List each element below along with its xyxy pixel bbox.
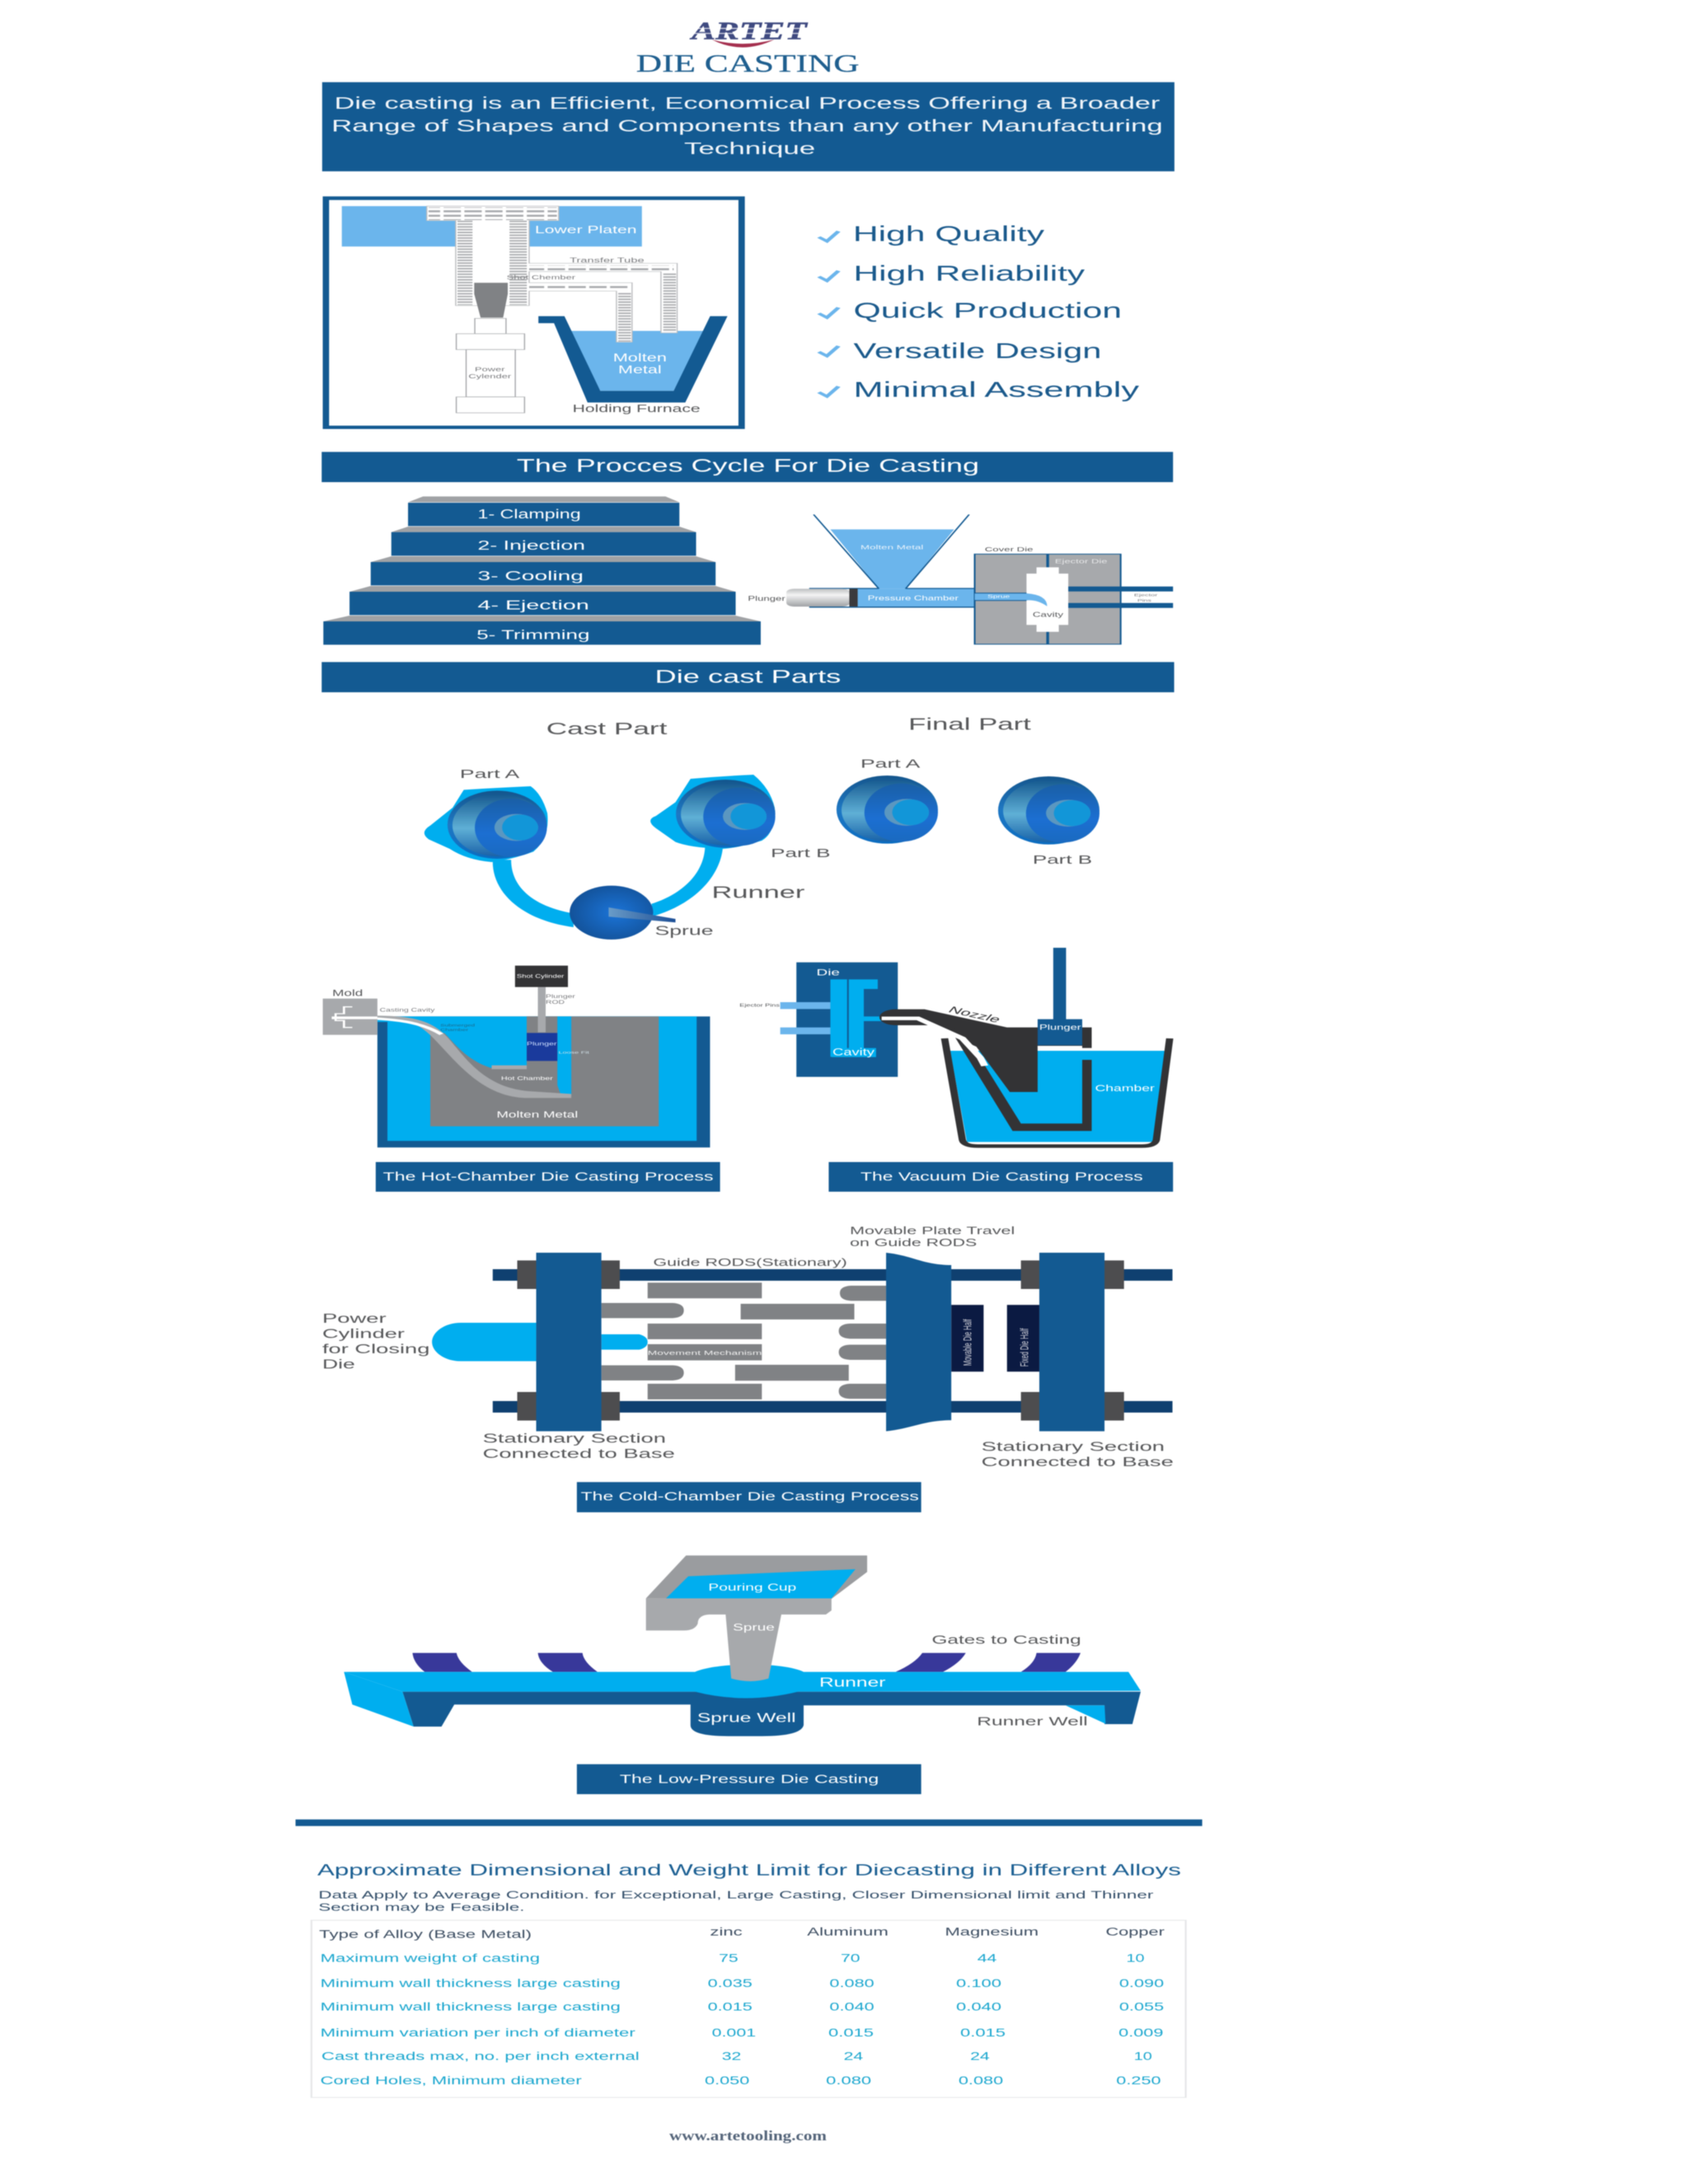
- cold chamber injection diagram: Ejector Die: [1055, 558, 1107, 565]
- row: cast threads: 24: [970, 2050, 990, 2063]
- cast part with runner and sprue: [424, 775, 776, 940]
- row: cast threads: [321, 2050, 1152, 2063]
- cold-chamber machine diagram: [432, 1253, 1173, 1432]
- heading banner: die cast parts: Die cast Parts: [655, 666, 841, 687]
- logo: ARTET: [690, 16, 808, 47]
- intro banner: [322, 82, 1175, 171]
- sprue: Sprue: [733, 1622, 775, 1633]
- lower platen: [342, 206, 642, 246]
- plunger: [1038, 948, 1082, 1045]
- benefits checklist: High Quality: [853, 222, 1044, 246]
- transfer tube and shot chamber: [427, 206, 678, 342]
- movable die half: [951, 1305, 983, 1371]
- table heading: Approximate Dimensional and Weight Limit for Diecasting in Different Alloys: [317, 1861, 1181, 1879]
- heading banner: process cycle: The Procces Cycle For Die Casting: [517, 456, 979, 476]
- runner body: [344, 1665, 1141, 1736]
- hot-chamber diagram: Hot Chamber: [501, 1076, 553, 1082]
- low-pressure labels: [697, 1633, 1088, 1727]
- caption: cold-chamber: [577, 1482, 921, 1512]
- stair steps: 2- Injection: [478, 539, 585, 553]
- fixed die half: Fixed Die Half: [1019, 1329, 1031, 1366]
- power cylinder: [457, 318, 524, 413]
- benefits checklist: Versatile Design: [854, 339, 1101, 363]
- data table: [312, 1920, 1186, 2097]
- row: cored holes: [321, 2074, 1161, 2087]
- hot-chamber diagram: Plunger: [546, 993, 575, 1000]
- row: maximum weight: 10: [1126, 1952, 1145, 1965]
- caption: low-pressure: [577, 1765, 921, 1794]
- transfer tube and shot chamber: Transfer Tube: [570, 256, 645, 264]
- hot-chamber diagram: Chamber: [440, 1029, 469, 1032]
- gooseneck nozzle: Nozzle: [945, 1005, 1004, 1024]
- holding furnace: Holding Furnace: [573, 403, 701, 415]
- die and cavity: Die: [817, 967, 840, 977]
- power cylinder: [432, 1323, 648, 1361]
- cold-chamber labels: for Closing: [322, 1343, 429, 1357]
- table header: zinc: [710, 1925, 743, 1938]
- hot-chamber diagram: Submerged: [440, 1024, 475, 1028]
- part labels: Sprue: [655, 924, 714, 938]
- row: maximum weight: [321, 1952, 1145, 1965]
- gates to casting: [412, 1653, 1081, 1672]
- shot cylinder and plunger: [515, 966, 568, 1061]
- caption: hot-chamber: [376, 1162, 720, 1192]
- row: wall thickness 2: 0.040: [956, 2000, 1001, 2013]
- fixed die half: [1007, 1305, 1039, 1371]
- gooseneck nozzle: [879, 1005, 1092, 1131]
- table header: Magnesium: [945, 1925, 1039, 1938]
- mold block: [323, 999, 377, 1035]
- row: wall thickness 2: 0.040: [829, 2000, 874, 2013]
- holding furnace: [538, 316, 728, 415]
- title: DIE CASTING: [636, 49, 860, 77]
- intro banner: Die casting is an Efficient, Economical Process Offering a Broader: [335, 93, 1160, 112]
- table note: [318, 1888, 1153, 1913]
- row: wall thickness 1: 0.080: [829, 1976, 874, 1990]
- row: minimum variation: 0.009: [1118, 2026, 1163, 2039]
- shot cylinder and plunger: Plunger: [527, 1041, 557, 1047]
- row: cored holes: 0.080: [959, 2074, 1003, 2087]
- movable plate: [886, 1253, 951, 1432]
- row: minimum variation: [321, 2026, 1163, 2039]
- divider bar: [296, 1820, 1203, 1826]
- cold chamber injection diagram: Pins: [1137, 598, 1151, 602]
- stair steps: 5- Trimming: [476, 628, 589, 642]
- part labels: [460, 715, 1092, 938]
- hot-chamber diagram: ROD: [546, 999, 565, 1005]
- row: maximum weight: 75: [719, 1952, 738, 1965]
- low-pressure labels: Gates to Casting: [931, 1633, 1081, 1647]
- die cast parts section: [424, 715, 1100, 940]
- caption: low-pressure: The Low-Pressure Die Casting: [620, 1772, 879, 1785]
- crucible and chamber: Chamber: [1095, 1083, 1155, 1093]
- hot-chamber diagram: [323, 966, 710, 1147]
- row: wall thickness 2: [321, 2000, 1164, 2013]
- intro banner: Range of Shapes and Components than any other Manufacturing: [331, 116, 1163, 135]
- row: wall thickness 1: 0.100: [956, 1976, 1001, 1990]
- row: cored holes: 0.050: [705, 2074, 749, 2087]
- cold chamber injection diagram: Sprue: [987, 594, 1010, 599]
- footer website: www.artetooling.com: [669, 2128, 827, 2144]
- part labels: Part B: [1033, 853, 1092, 866]
- row: wall thickness 1: 0.090: [1119, 1976, 1164, 1990]
- hot-chamber diagram: Mold: [332, 988, 363, 998]
- hot-chamber and vacuum process section: [323, 948, 1173, 1192]
- table header: Aluminum: [807, 1925, 889, 1938]
- movement mechanism links: [602, 1282, 886, 1399]
- cold-chamber labels: on Guide RODS: [850, 1237, 977, 1249]
- benefits checklist: Quick Production: [854, 298, 1122, 322]
- stair steps: 3- Cooling: [478, 569, 584, 583]
- part labels: Part A: [860, 757, 921, 771]
- caption: vacuum: The Vacuum Die Casting Process: [860, 1169, 1143, 1183]
- logo: ARTET: ARTET: [690, 16, 808, 45]
- header and intro section: [322, 16, 1175, 429]
- cold-chamber labels: Movable Plate Travel: [850, 1225, 1015, 1237]
- stair steps: [323, 496, 761, 644]
- table header: Copper: [1105, 1925, 1165, 1938]
- power cylinder: Power: [475, 366, 505, 373]
- cold-chamber process section: [322, 1225, 1174, 1512]
- low-pressure process section: [344, 1555, 1141, 1794]
- part labels: Part B: [771, 846, 830, 860]
- row: minimum variation: 0.001: [712, 2026, 756, 2039]
- row: wall thickness 1: [321, 1976, 1164, 1990]
- cold-chamber labels: Stationary Section: [483, 1432, 666, 1446]
- cold chamber injection diagram: Cavity: [1033, 611, 1064, 618]
- table header: Type of Alloy (Base Metal): [319, 1928, 532, 1940]
- cold chamber injection diagram: Ejector: [1134, 593, 1158, 598]
- hot-chamber diagram: Molten Metal: [497, 1110, 578, 1119]
- part labels: Cast Part: [546, 719, 667, 738]
- hot-chamber diagram: Casting Cavity: [380, 1007, 435, 1014]
- caption: hot-chamber: The Hot-Chamber Die Casting Process: [383, 1169, 714, 1183]
- row: wall thickness 2: 0.055: [1119, 2000, 1164, 2013]
- row: cast threads: 32: [722, 2050, 741, 2063]
- transfer tube and shot chamber: Shot Chember: [507, 274, 575, 281]
- pouring cup and sprue: [646, 1555, 867, 1630]
- die and cavity: Ejector Pins: [739, 1003, 780, 1008]
- table note: Section may be Feasible.: [318, 1900, 524, 1913]
- lower platen: Lower Platen: [535, 224, 636, 236]
- movable die half: Movable Die Half: [962, 1319, 974, 1366]
- shot cylinder and plunger: Shot Cylinder: [517, 973, 565, 980]
- stationary plates: [537, 1253, 1104, 1432]
- low-pressure labels: Runner: [819, 1676, 885, 1690]
- row: maximum weight: 44: [978, 1952, 996, 1965]
- intro banner: Technique: [684, 139, 815, 158]
- cold-chamber labels: Power: [322, 1312, 387, 1326]
- row: cored holes: Cored Holes, Minimum diameter: [321, 2074, 582, 2087]
- row: cored holes: 0.080: [826, 2074, 871, 2087]
- holding furnace: Metal: [618, 363, 662, 376]
- cold-chamber labels: Connected to Base: [483, 1447, 675, 1461]
- row: cast threads: 10: [1134, 2050, 1152, 2063]
- cold-chamber labels: Guide RODS(Stationary): [653, 1257, 847, 1268]
- cold chamber injection diagram: Pressure Chamber: [868, 594, 959, 602]
- part labels: Part A: [460, 767, 520, 780]
- row: maximum weight: Maximum weight of casting: [321, 1952, 540, 1965]
- cold-chamber labels: [322, 1225, 1174, 1469]
- final part A: [837, 776, 938, 844]
- row: minimum variation: 0.015: [960, 2026, 1006, 2039]
- final part B: [998, 776, 1100, 845]
- row: wall thickness 1: Minimum wall thickness large casting: [321, 1976, 621, 1990]
- panel: low pressure die casting machine diagram: [323, 196, 745, 429]
- benefits checklist: High Reliability: [854, 261, 1085, 285]
- row: cast threads: Cast threads max, no. per inch external: [321, 2050, 640, 2063]
- caption: cold-chamber: The Cold-Chamber Die Casting Process: [581, 1489, 919, 1503]
- cold chamber injection diagram: Plunger: [748, 594, 785, 602]
- cold-chamber labels: Cylinder: [322, 1328, 405, 1341]
- row: wall thickness 1: 0.035: [708, 1976, 753, 1990]
- cold chamber injection diagram: Molten Metal: [860, 544, 923, 551]
- die and cavity: Cavity: [832, 1047, 874, 1058]
- row: cored holes: 0.250: [1116, 2074, 1161, 2087]
- part labels: Runner: [711, 883, 804, 902]
- pouring cup and sprue: Pouring Cup: [708, 1582, 796, 1593]
- row: minimum variation: Minimum variation per inch of diameter: [321, 2026, 635, 2039]
- row: wall thickness 2: 0.015: [708, 2000, 753, 2013]
- caption: vacuum: [828, 1162, 1173, 1192]
- table note: Data Apply to Average Condition. for Exceptional, Large Casting, Closer Dimensional limit and Thinner: [318, 1888, 1153, 1900]
- cold chamber injection diagram: [748, 514, 1173, 644]
- sprue: [725, 1615, 781, 1681]
- row: minimum variation: 0.015: [828, 2026, 874, 2039]
- stair steps: 4- Ejection: [478, 598, 589, 612]
- alloy limits section: [296, 1820, 1203, 2097]
- table header: [319, 1925, 1165, 1940]
- plunger: Plunger: [1039, 1023, 1081, 1032]
- cold-chamber labels: Connected to Base: [982, 1455, 1174, 1469]
- low-pressure labels: Runner Well: [977, 1714, 1088, 1727]
- cold chamber injection diagram: Cover Die: [985, 546, 1034, 553]
- row: cast threads: 24: [844, 2050, 863, 2063]
- low-pressure labels: Sprue Well: [697, 1711, 796, 1725]
- cold-chamber labels: Die: [322, 1358, 355, 1371]
- part labels: Final Part: [908, 715, 1031, 734]
- vacuum die casting diagram: [739, 948, 1170, 1146]
- cold-chamber labels: Stationary Section: [982, 1441, 1165, 1454]
- process cycle section: [321, 452, 1175, 692]
- power cylinder: Cylender: [468, 373, 511, 380]
- row: wall thickness 2: Minimum wall thickness large casting: [321, 2000, 621, 2013]
- hot-chamber diagram: Loose Fit: [559, 1051, 589, 1055]
- stair steps: 1- Clamping: [478, 508, 581, 522]
- heading banner: process cycle: [321, 452, 1173, 482]
- die and cavity: [739, 963, 898, 1077]
- cold-chamber machine diagram: Movement Mechanism: [648, 1350, 762, 1357]
- heading banner: die cast parts: [321, 662, 1175, 692]
- benefits checklist: [818, 222, 1139, 401]
- benefits checklist: Minimal Assembly: [854, 377, 1139, 401]
- crucible and chamber: [945, 1038, 1170, 1146]
- row: maximum weight: 70: [841, 1952, 860, 1965]
- holding furnace: Molten: [613, 351, 667, 363]
